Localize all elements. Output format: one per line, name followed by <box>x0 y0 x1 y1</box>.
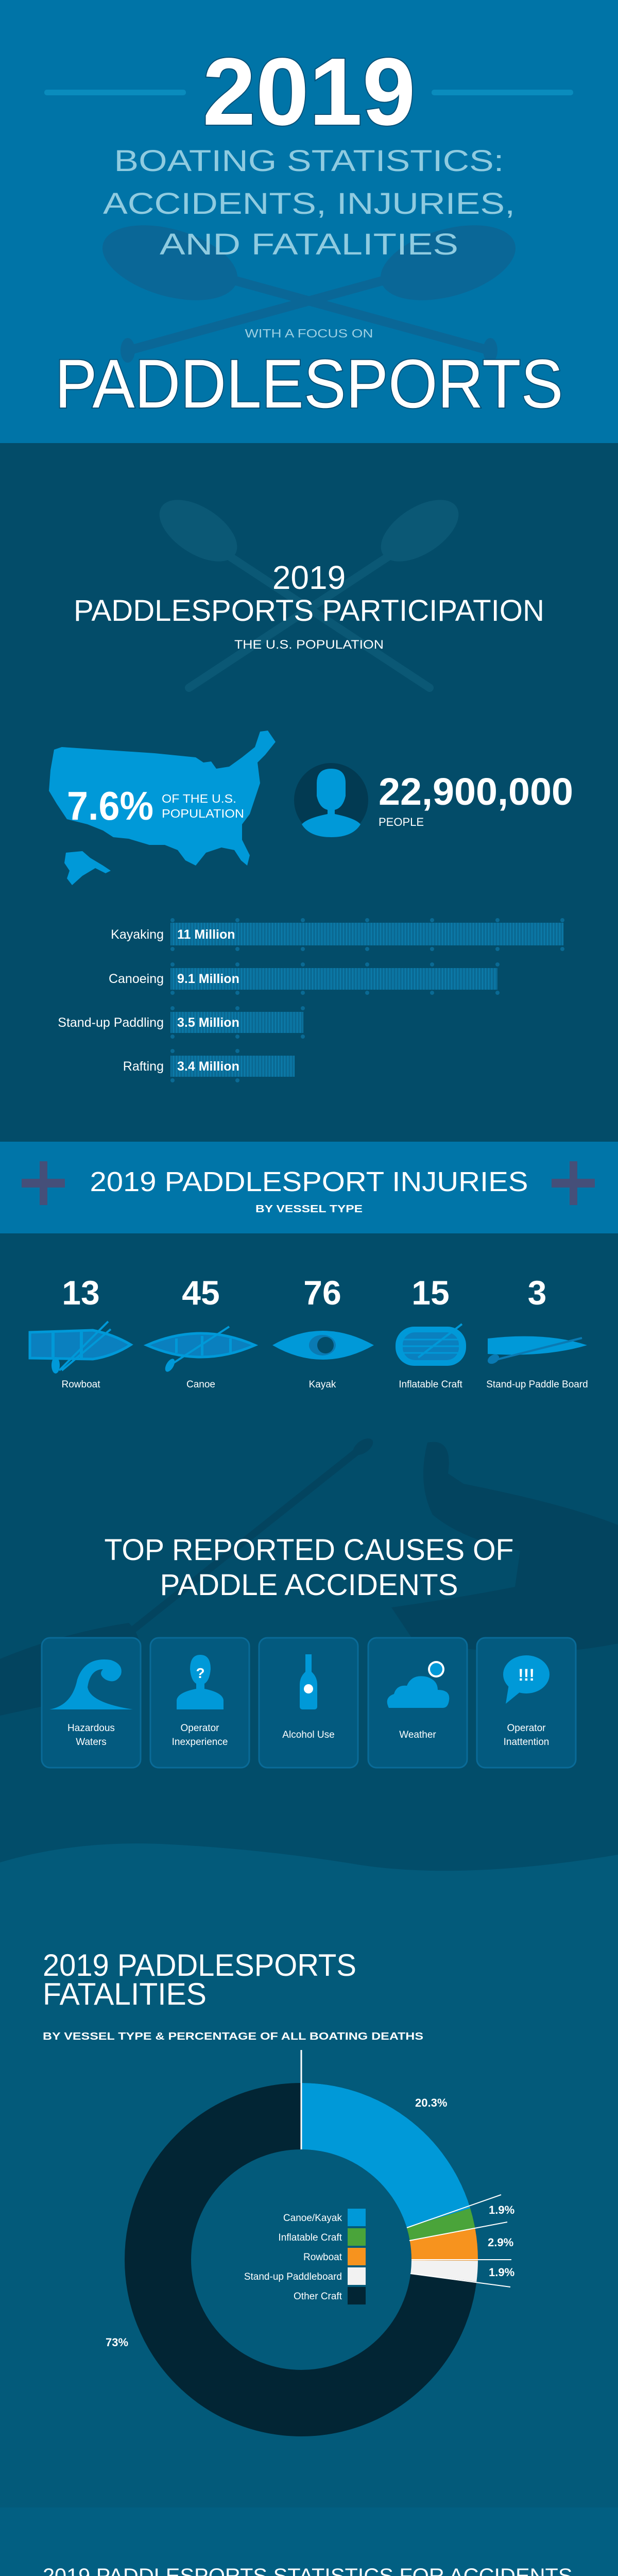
bar chart: participation by activity: 3.5 Million <box>177 1015 239 1030</box>
bar chart: participation by activity: Stand-up Paddling <box>58 1015 164 1030</box>
fatalities heading <box>43 1948 423 2042</box>
injury counts by vessel <box>30 1274 588 1390</box>
injury counts by vessel: Canoe <box>186 1379 215 1390</box>
header: crossed oars <box>94 211 524 363</box>
stat: 22,900,000 people: PEOPLE <box>379 816 424 828</box>
icon: inflatable craft <box>396 1324 466 1366</box>
subtitle: boating statistics: AND FATALITIES <box>160 228 458 261</box>
subtitle: boating statistics: ACCIDENTS, INJURIES, <box>103 187 515 221</box>
footer background <box>0 2507 618 2576</box>
card: hazardous waters: Waters <box>76 1737 107 1748</box>
icon: stand-up paddle board <box>486 1336 587 1366</box>
icon: kayak <box>272 1331 374 1360</box>
bar chart: participation by activity: Kayaking <box>111 927 164 942</box>
US map with percentage: POPULATION <box>162 807 244 820</box>
participation background <box>0 443 618 1142</box>
donut chart: fatalities: 2.9% <box>488 2236 513 2249</box>
card: operator inattention <box>477 1638 576 1768</box>
cause cards <box>42 1638 576 1768</box>
subtitle: boating statistics <box>103 144 515 261</box>
US map with percentage: 7.6% <box>67 783 153 828</box>
injuries/causes background <box>0 1233 618 1908</box>
injuries banner: 2019 PADDLESPORT INJURIES <box>90 1166 528 1197</box>
legend: Inflatable Craft <box>278 2232 342 2243</box>
header: decorative lines <box>44 90 573 95</box>
injury counts by vessel: 13 <box>62 1274 100 1312</box>
card: alcohol use: Alcohol Use <box>282 1730 335 1740</box>
card: weather: Weather <box>399 1730 436 1740</box>
card: operator inattention: Operator <box>507 1723 546 1734</box>
donut chart: fatalities: 20.3% <box>415 2096 447 2109</box>
icon: canoe <box>147 1327 255 1374</box>
header background <box>0 0 618 443</box>
bar chart: participation by activity <box>58 918 564 1082</box>
injury counts by vessel: Kayak <box>309 1379 336 1390</box>
participation heading: 2019 <box>272 559 346 596</box>
card: operator inattention: Inattention <box>504 1737 549 1748</box>
title: 2019: 2019 <box>202 39 416 145</box>
injury counts by vessel: Inflatable Craft <box>399 1379 462 1390</box>
donut chart: fatalities: 1.9% <box>489 2266 514 2279</box>
US map with percentage: OF THE U.S. <box>162 792 236 805</box>
fatalities background <box>0 1906 618 2507</box>
wave transition <box>0 1843 618 1909</box>
card: operator inexperience: Operator <box>181 1723 219 1734</box>
card: weather <box>368 1638 467 1768</box>
injury counts by vessel: 45 <box>182 1274 220 1312</box>
fatalities heading: FATALITIES <box>43 1977 207 2011</box>
legend: Other Craft <box>294 2291 342 2302</box>
subtitle: boating statistics: BOATING STATISTICS: <box>114 144 504 178</box>
causes heading: PADDLE ACCIDENTS <box>160 1568 458 1602</box>
card: operator inexperience <box>150 1638 249 1768</box>
participation heading <box>74 559 544 652</box>
legend: Stand-up Paddleboard <box>244 2272 342 2282</box>
injury counts by vessel: 3 <box>528 1274 546 1312</box>
bar chart: participation by activity: 9.1 Million <box>177 972 239 986</box>
icon: rowboat <box>30 1321 131 1374</box>
background kayaker silhouette <box>0 1435 618 1716</box>
donut chart: fatalities: 1.9% <box>489 2204 514 2216</box>
with a focus on: WITH A FOCUS ON <box>245 327 373 340</box>
bar chart: participation by activity: 3.4 Million <box>177 1059 239 1074</box>
fatalities heading: 2019 PADDLESPORTS <box>43 1948 356 1982</box>
participation heading: THE U.S. POPULATION <box>234 638 384 652</box>
card: alcohol use <box>259 1638 358 1768</box>
US map with percentage <box>49 731 276 885</box>
injury counts by vessel: Rowboat <box>62 1379 100 1390</box>
donut chart: fatalities: 73% <box>106 2336 128 2349</box>
causes heading <box>104 1533 514 1602</box>
injury counts by vessel: Stand-up Paddle Board <box>486 1379 588 1390</box>
icon: plus right <box>552 1161 595 1205</box>
card: operator inexperience: Inexperience <box>172 1737 228 1748</box>
bar chart: participation by activity: Canoeing <box>109 972 164 986</box>
donut chart: fatalities <box>106 2050 514 2403</box>
person icon <box>294 763 368 837</box>
card: hazardous waters <box>42 1638 141 1768</box>
participation: background oars <box>149 487 469 688</box>
injuries banner: BY VESSEL TYPE <box>255 1204 363 1215</box>
bar chart: participation by activity: Rafting <box>123 1059 164 1074</box>
card: operator inexperience: ? <box>196 1665 205 1681</box>
injuries banner <box>0 1142 618 1233</box>
causes heading: TOP REPORTED CAUSES OF <box>104 1533 514 1567</box>
legend: Rowboat <box>303 2252 342 2263</box>
injury counts by vessel: 76 <box>303 1274 341 1312</box>
fatalities heading: BY VESSEL TYPE & PERCENTAGE OF ALL BOATING DEATHS <box>43 2031 423 2042</box>
title: paddlesports: PADDLESPORTS <box>55 346 563 422</box>
participation heading: PADDLESPORTS PARTICIPATION <box>74 594 544 628</box>
injury counts by vessel: 15 <box>411 1274 450 1312</box>
stat: 22,900,000 people: 22,900,000 <box>379 770 573 813</box>
legend: Canoe/Kayak <box>283 2213 342 2224</box>
card: hazardous waters: Hazardous <box>67 1723 115 1734</box>
bar chart: participation by activity: 11 Million <box>177 927 235 942</box>
legend <box>244 2209 366 2304</box>
card: operator inattention: !!! <box>518 1666 535 1684</box>
icon: plus left <box>22 1161 65 1205</box>
